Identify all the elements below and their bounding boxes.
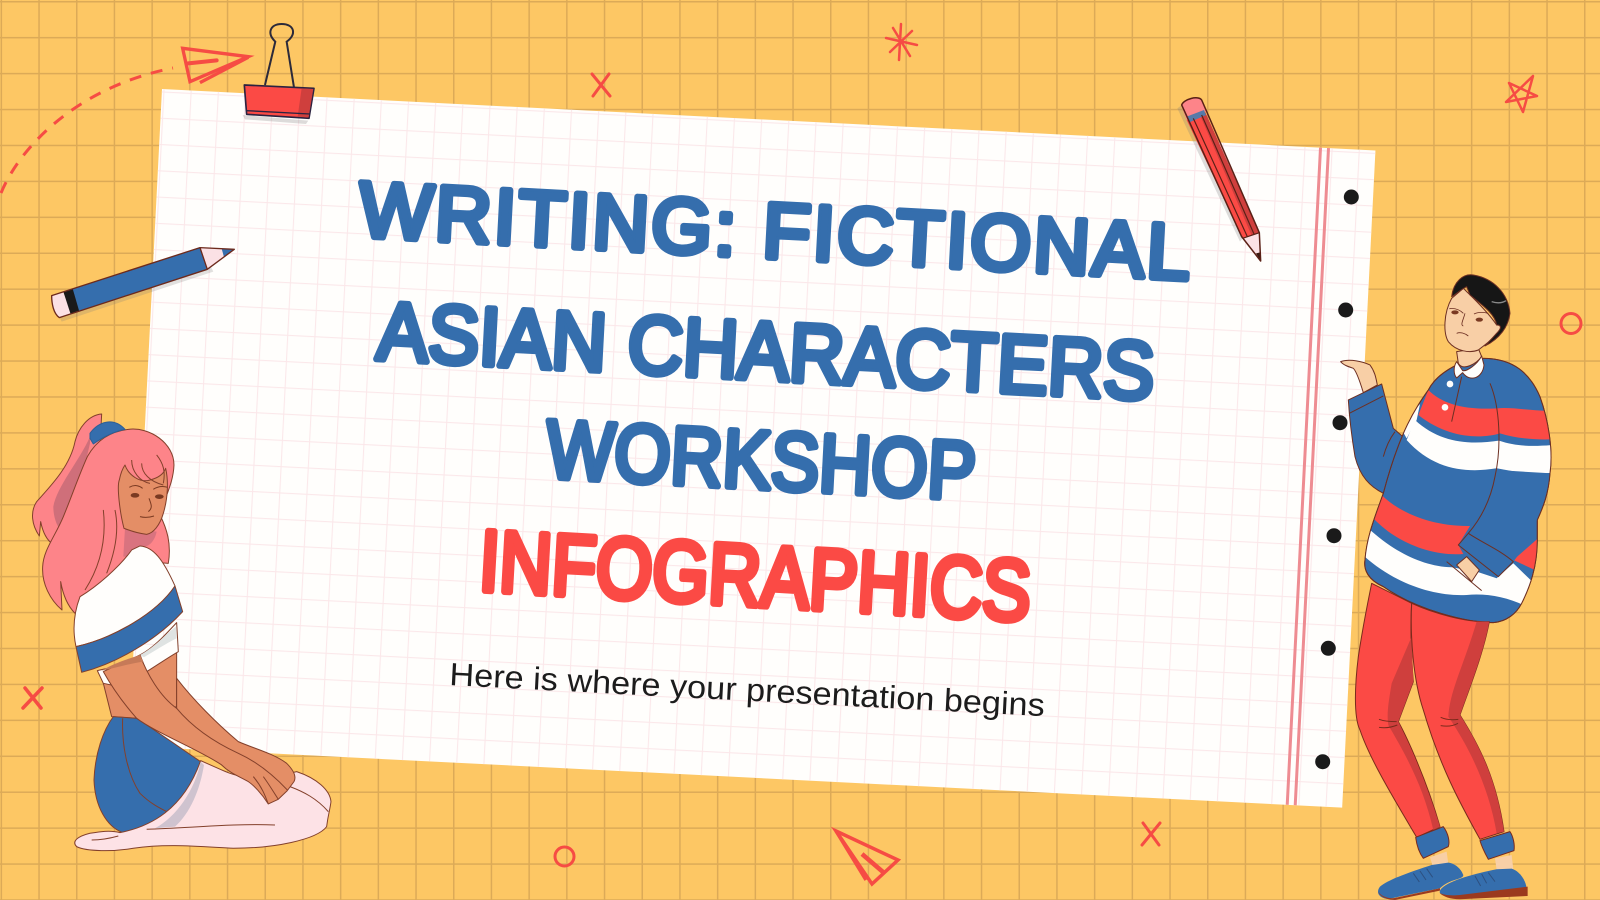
hand in pocket	[1457, 557, 1479, 582]
ponytail shadow	[53, 437, 90, 528]
icon: red circle right	[1561, 314, 1581, 334]
inner top	[140, 623, 178, 672]
cape blue band	[76, 586, 183, 672]
title: WRITING: FICTIONAL	[357, 165, 1193, 297]
cuffs	[1416, 827, 1449, 858]
neck shadow	[123, 528, 157, 557]
face	[1445, 288, 1502, 352]
subtitle: Here is where your presentation begins	[449, 656, 1046, 723]
hair	[1452, 275, 1510, 346]
long hair	[43, 429, 174, 613]
facial features	[129, 486, 168, 517]
left shoe	[1378, 863, 1463, 899]
panel: notebook paper	[129, 89, 1375, 808]
title accent: infographics: INFOGRAPHICS	[477, 513, 1033, 640]
icon: red circle bottom	[555, 847, 574, 866]
arm shadow	[102, 655, 143, 671]
cuff	[1458, 533, 1513, 577]
raised hand	[1341, 360, 1377, 393]
title: ASIAN CHARACTERS	[375, 286, 1157, 418]
right leg	[1411, 603, 1504, 839]
icon: blue pencil	[52, 248, 234, 322]
title: WORKSHOP	[544, 404, 978, 517]
legs shadow	[155, 762, 204, 828]
neck	[1457, 348, 1482, 367]
ponytail	[32, 414, 102, 544]
shorts	[94, 717, 201, 833]
title	[357, 165, 1193, 517]
arms and hand	[103, 655, 295, 804]
face	[118, 465, 167, 534]
face features	[1449, 309, 1488, 336]
boy upper body	[1341, 275, 1553, 623]
boy trousers and shoes	[1355, 583, 1528, 900]
icon: red x top	[592, 74, 610, 96]
ankles	[1430, 852, 1448, 866]
knee creases	[1379, 717, 1458, 728]
icon: paper plane bottom	[836, 831, 898, 884]
left leg	[1355, 583, 1440, 837]
icon: red x left	[23, 688, 42, 708]
buttons	[1447, 381, 1453, 387]
illustration: standing boy	[1341, 275, 1553, 900]
icon: asterisk	[886, 24, 917, 60]
margin lines	[1287, 148, 1329, 805]
seams	[1452, 377, 1499, 533]
sweater	[1365, 358, 1551, 623]
sweater outline	[1365, 358, 1551, 623]
icon: binder clip	[243, 24, 314, 124]
sweater stripes	[1362, 390, 1553, 607]
binder holes	[1315, 190, 1359, 769]
right shoe	[1440, 869, 1527, 897]
dashed flight path	[1, 68, 173, 193]
raised sleeve	[1348, 384, 1407, 493]
legs	[75, 761, 331, 851]
icon: star	[1506, 76, 1537, 112]
icon: paper plane top	[183, 48, 248, 83]
hair tie	[90, 422, 125, 444]
icon: red x bottom	[1142, 823, 1160, 845]
hair strands	[85, 455, 164, 590]
icon: red pencil	[1177, 98, 1261, 261]
cape white	[74, 546, 175, 647]
illustration: seated girl	[32, 414, 331, 851]
collar	[1454, 356, 1484, 378]
torso	[100, 650, 177, 718]
